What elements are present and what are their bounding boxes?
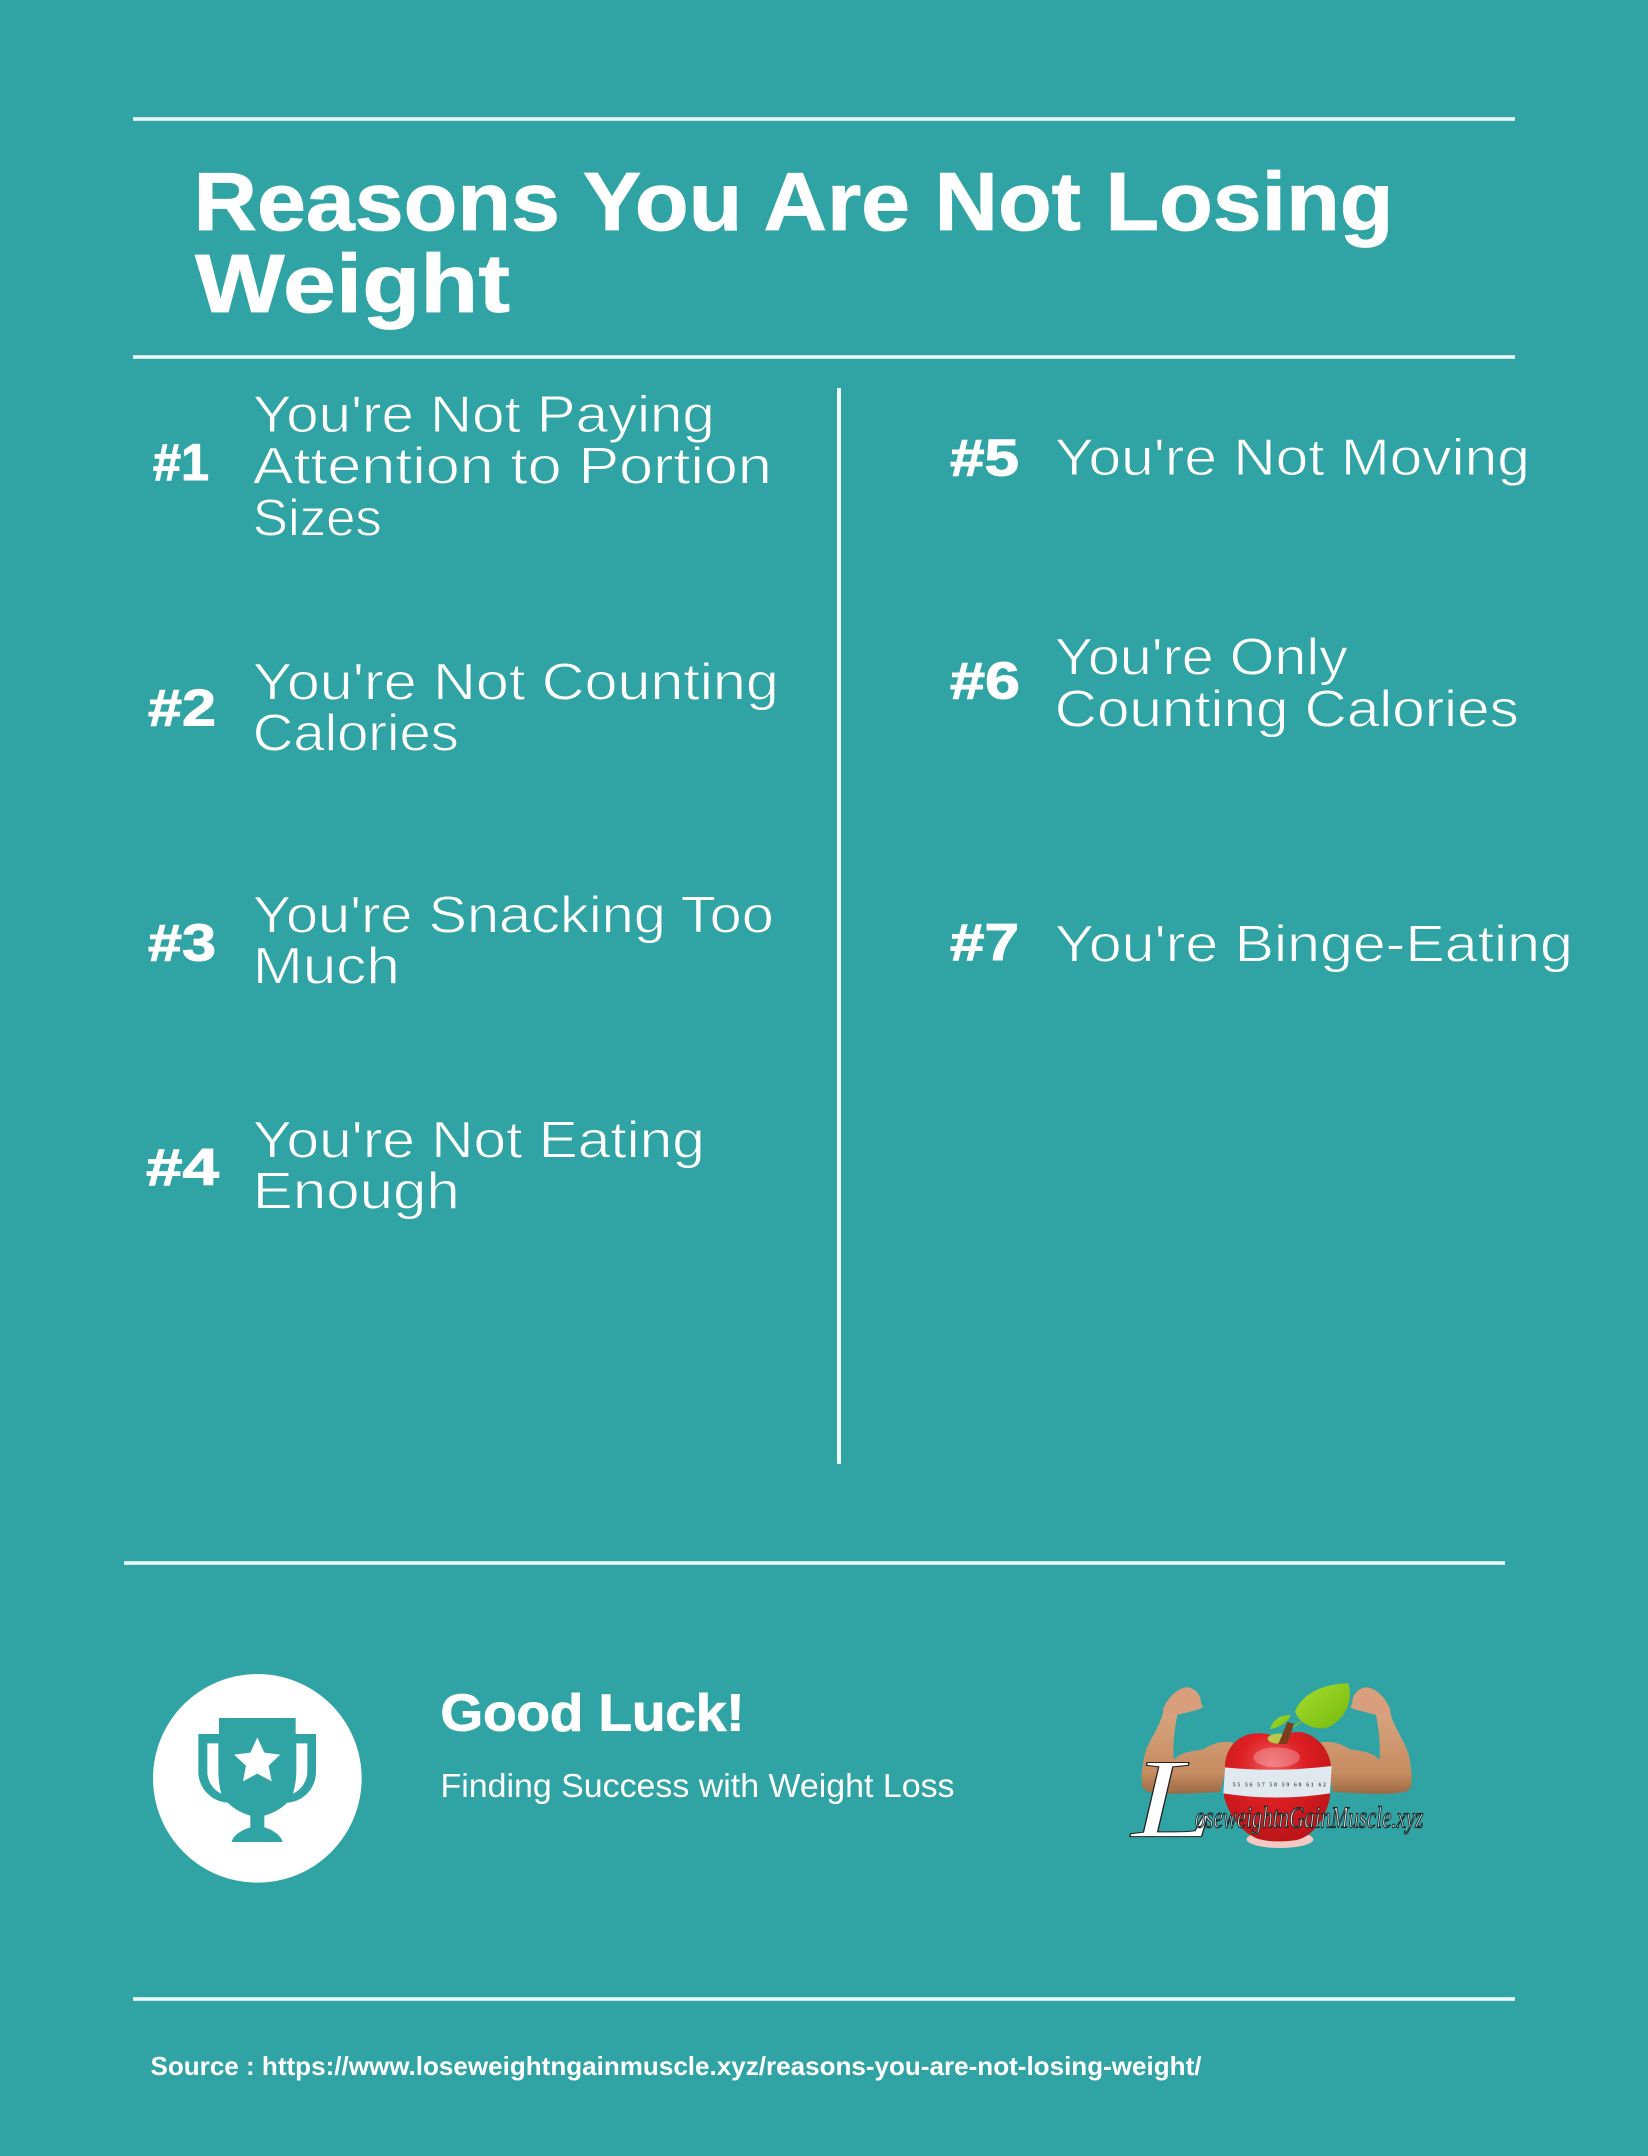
reason 2: Calories: [253, 704, 459, 762]
reason 6: Counting Calories: [1055, 680, 1519, 738]
reason 6: #6: [950, 652, 1020, 710]
logo: flexing apple: L: [1129, 1736, 1215, 1862]
reason 7: You're Binge-Eating: [1055, 916, 1573, 974]
reason 5: #5: [950, 430, 1019, 488]
closing subheading: Finding Success with Weight Loss: [440, 1767, 954, 1804]
logo: flexing apple: oseweightnGainMuscle.xyz: [1195, 1800, 1423, 1834]
reason 1: Sizes: [253, 490, 382, 548]
reason 3: Much: [253, 938, 400, 996]
source line: Source : https://www.loseweightngainmuscle.xyz/reasons-you-are-not-losing-weight/: [150, 2051, 1202, 2081]
reason 4: Enough: [253, 1162, 460, 1220]
reason 2: [148, 654, 779, 762]
title: [194, 155, 1394, 330]
reason 1: [153, 386, 772, 548]
reason 1: #1: [153, 434, 209, 492]
reason 2: You're Not Counting: [253, 654, 779, 712]
reason 6: [950, 628, 1519, 738]
reason 7: #7: [950, 914, 1019, 972]
title: Reasons You Are Not Losing: [194, 155, 1394, 248]
title: Weight: [195, 237, 510, 330]
reason 2: #2: [148, 680, 216, 738]
closing heading: Good Luck!: [440, 1684, 744, 1742]
reason 1: You're Not Paying: [253, 386, 715, 444]
logo: flexing apple: [1129, 1683, 1423, 1862]
icon: trophy badge: [153, 1674, 362, 1883]
reason 3: You're Snacking Too: [253, 886, 774, 944]
reason 5: You're Not Moving: [1055, 429, 1530, 487]
reason 4: You're Not Eating: [253, 1112, 705, 1170]
reason 4: [146, 1112, 705, 1220]
reason 3: #3: [148, 914, 216, 972]
reason 4: #4: [146, 1139, 219, 1197]
logo: flexing apple: 55 56 57 58 59 60 61 62: [1233, 1783, 1326, 1789]
reason 3: [148, 886, 774, 996]
reason 6: You're Only: [1055, 628, 1348, 686]
reason 1: Attention to Portion: [253, 438, 772, 496]
